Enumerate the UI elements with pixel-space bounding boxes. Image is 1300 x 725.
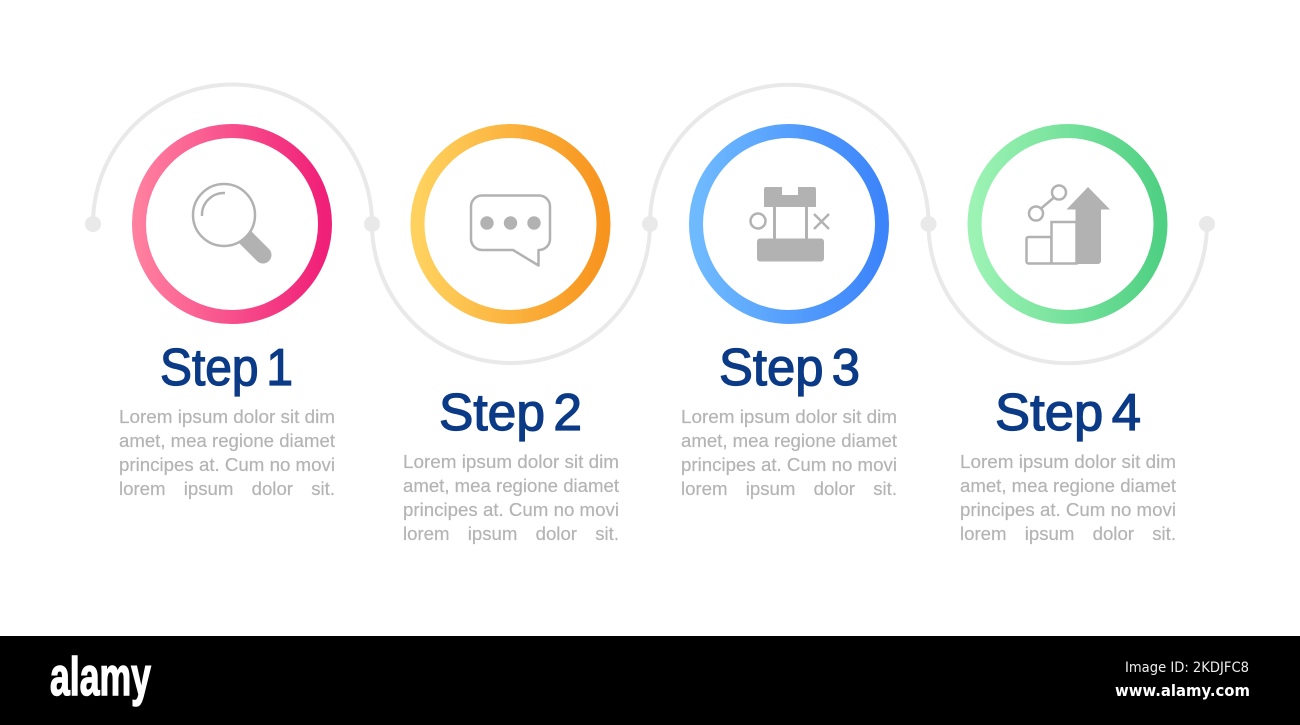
text block: step 2 bbox=[403, 451, 619, 544]
ring: step 3 bbox=[696, 131, 882, 317]
text block: step 3: principes at. Cum no movi bbox=[681, 454, 897, 475]
watermark logo: alamy bbox=[50, 647, 151, 707]
image id: Image ID: 2KDJFC8 bbox=[1125, 660, 1249, 676]
icon: strategy tower bbox=[750, 187, 829, 262]
icon: speech bubble bbox=[471, 196, 550, 266]
text block: step 2: lorem ipsum dolor sit. bbox=[403, 523, 619, 544]
icon: growth chart with arrow bbox=[1026, 186, 1110, 264]
ring: step 2 bbox=[418, 131, 604, 317]
ring: step 1 bbox=[139, 131, 325, 317]
text block: step 3: lorem ipsum dolor sit. bbox=[681, 478, 897, 499]
ring: step 4 bbox=[974, 131, 1160, 317]
icon: magnifying glass bbox=[193, 184, 263, 255]
heading: step 2: Step 2 bbox=[439, 384, 582, 442]
panel: step 2 bbox=[403, 131, 619, 544]
heading: step 3: Step 3 bbox=[719, 339, 860, 397]
text block: step 2: Lorem ipsum dolor sit dim bbox=[403, 451, 619, 472]
text block: step 3: amet, mea regione diamet bbox=[681, 430, 897, 451]
text block: step 1 bbox=[119, 406, 335, 499]
text block: step 2: amet, mea regione diamet bbox=[403, 475, 619, 496]
panel: step 4 bbox=[960, 131, 1176, 544]
heading: step 4: Step 4 bbox=[995, 384, 1141, 442]
text block: step 2: principes at. Cum no movi bbox=[403, 499, 619, 520]
text block: step 1: Lorem ipsum dolor sit dim bbox=[119, 406, 335, 427]
text block: step 3 bbox=[681, 406, 897, 499]
text block: step 1: lorem ipsum dolor sit. bbox=[119, 478, 335, 499]
text block: step 1: amet, mea regione diamet bbox=[119, 430, 335, 451]
footer band bbox=[0, 636, 1300, 725]
text block: step 4 bbox=[960, 451, 1176, 544]
text block: step 3: Lorem ipsum dolor sit dim bbox=[681, 406, 897, 427]
text block: step 4: principes at. Cum no movi bbox=[960, 499, 1176, 520]
website: www.alamy.com bbox=[1115, 681, 1250, 700]
panel: step 3 bbox=[681, 131, 897, 499]
text block: step 4: Lorem ipsum dolor sit dim bbox=[960, 451, 1176, 472]
text block: step 4: amet, mea regione diamet bbox=[960, 475, 1176, 496]
panel: step 1 bbox=[119, 131, 335, 499]
connector path with nodes bbox=[85, 85, 1215, 363]
text block: step 4: lorem ipsum dolor sit. bbox=[960, 523, 1176, 544]
heading: step 1: Step 1 bbox=[160, 339, 293, 397]
text block: step 1: principes at. Cum no movi bbox=[119, 454, 335, 475]
